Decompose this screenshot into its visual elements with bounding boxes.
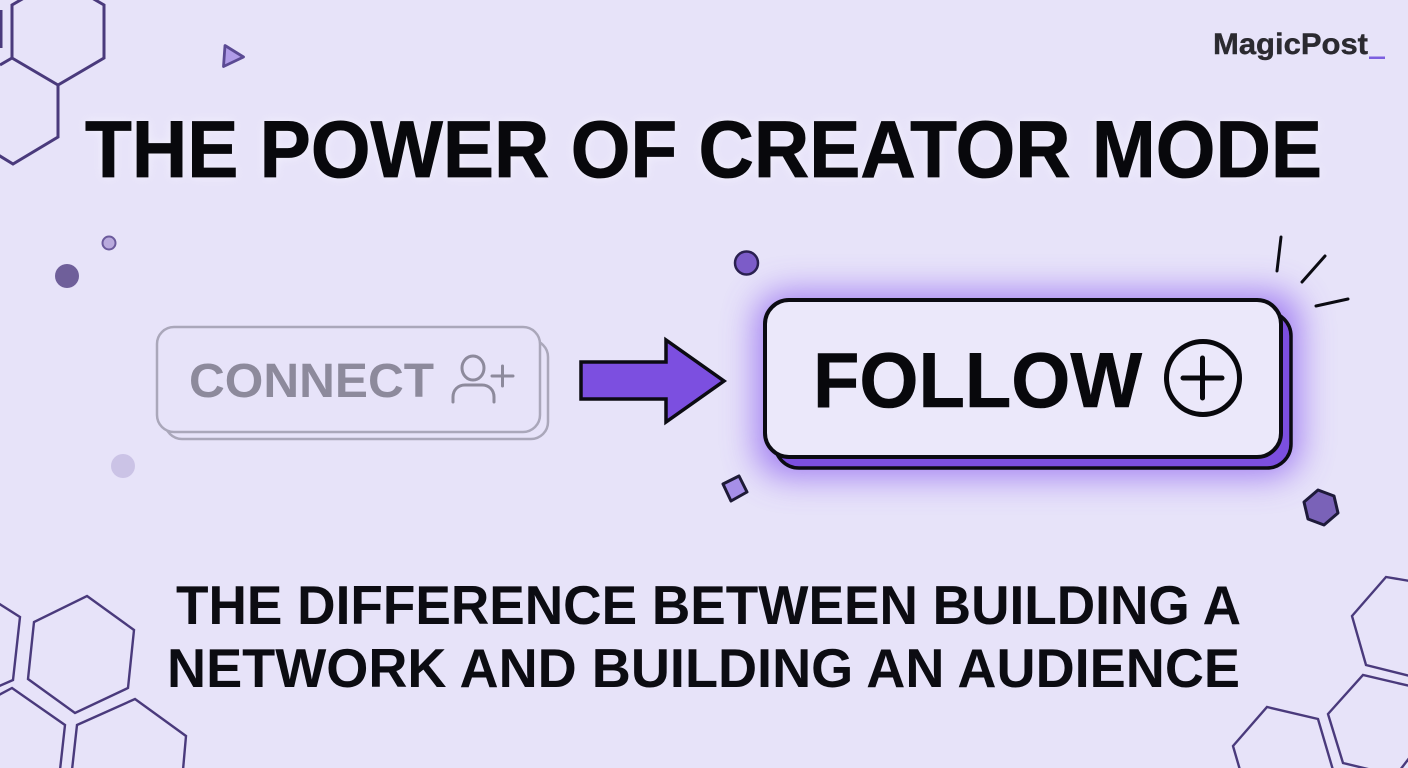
- decorative hexagon: [1304, 490, 1338, 525]
- decorative circle: purple: [735, 252, 758, 274]
- decorative dot: dark: [55, 264, 79, 288]
- hexagons: bottom right: [1233, 577, 1408, 768]
- connect button back layer: [165, 340, 548, 439]
- subtitle: [167, 574, 1241, 699]
- title: THE POWER OF CREATOR MODE: [85, 105, 1322, 195]
- decorative dot: pale: [111, 454, 135, 478]
- follow label: FOLLOW: [813, 336, 1142, 424]
- connect label: CONNECT: [189, 355, 434, 408]
- decorative dot: small: [102, 236, 116, 250]
- hexagons: bottom left: [0, 596, 186, 768]
- connect button face: [157, 327, 540, 432]
- arrow: [581, 340, 724, 422]
- connect button: [157, 327, 548, 439]
- follow button: [756, 292, 1300, 477]
- follow button face: [765, 300, 1281, 457]
- logo: MagicPost: [1213, 28, 1368, 61]
- spark lines: [1277, 237, 1348, 306]
- subtitle line 1: THE DIFFERENCE BETWEEN BUILDING A: [176, 574, 1241, 636]
- follow button back layer: [775, 312, 1291, 468]
- icon: plus in circle: [1166, 342, 1240, 414]
- icon: add user: [453, 356, 513, 402]
- hexagons: top left: [0, 0, 104, 164]
- decorative diamond: [723, 476, 747, 501]
- title: THE POWER OF CREATOR MODE: [85, 105, 1322, 195]
- subtitle line 2: NETWORK AND BUILDING AN AUDIENCE: [167, 637, 1240, 699]
- decorative triangle: [224, 46, 244, 66]
- follow button glow: [756, 292, 1300, 477]
